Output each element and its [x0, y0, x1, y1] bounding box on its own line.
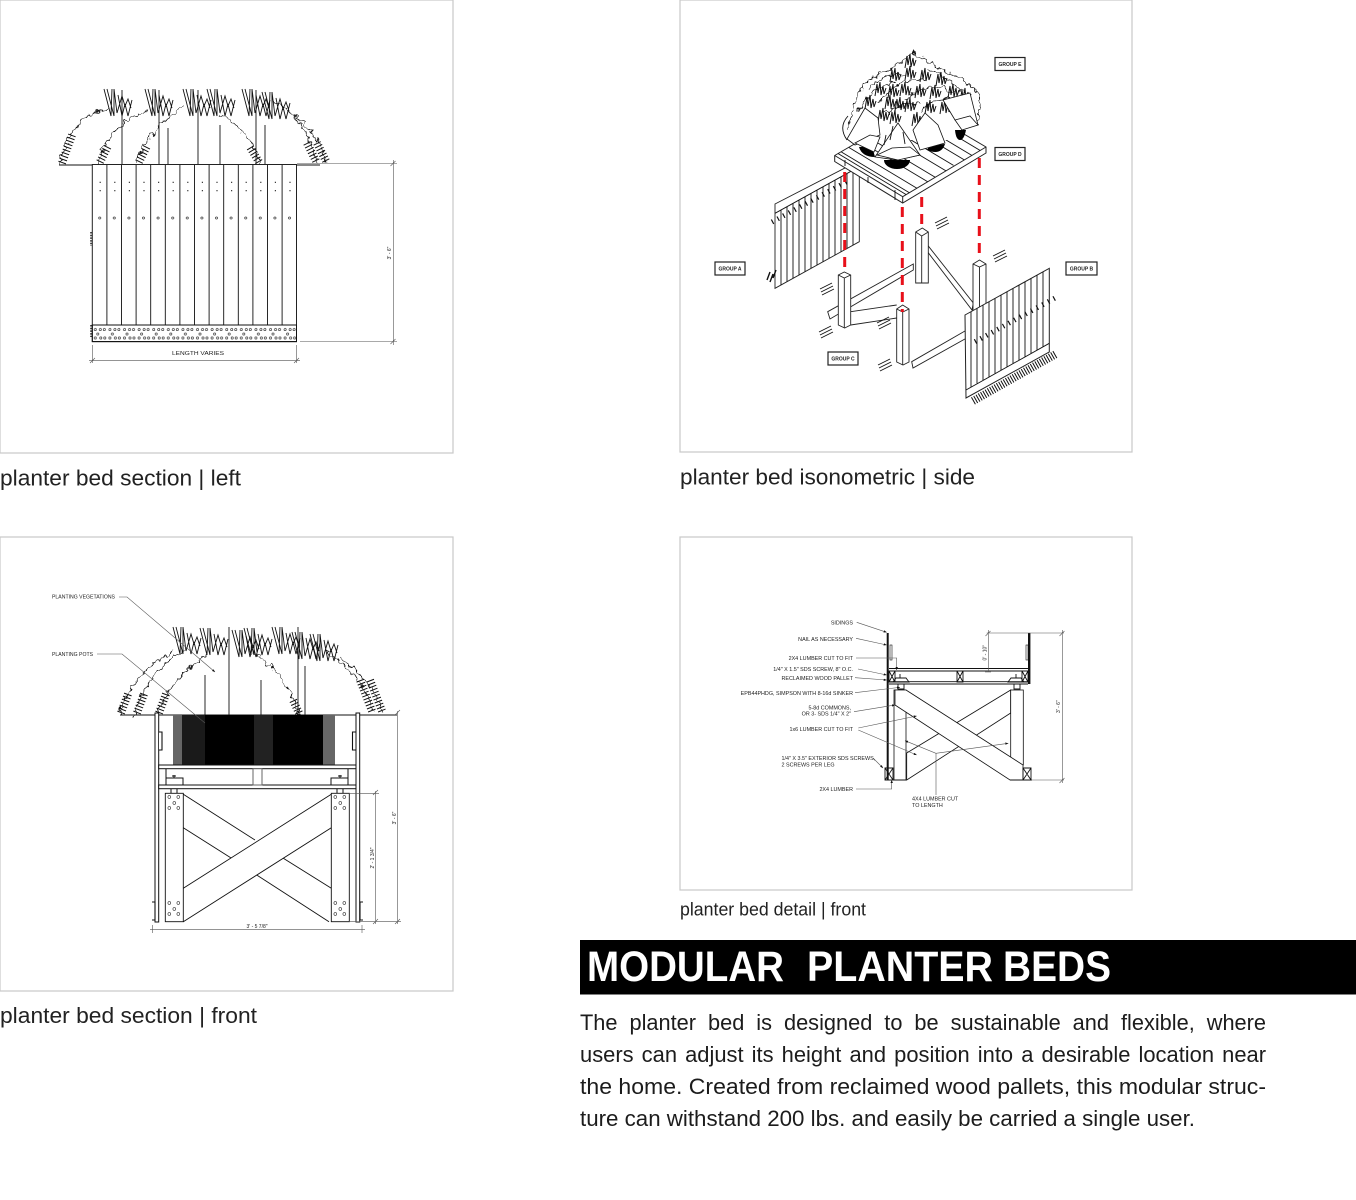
caption: section front: planter bed section | front [0, 1003, 257, 1028]
detail labels: 1/4" X 1.5" SDS SCREW, 8" O.C. [773, 667, 853, 673]
detail leaders [854, 622, 1008, 795]
black pots [859, 130, 966, 169]
description paragraph: The planter bed is designed to be sustainable and flexible, where [580, 1010, 1266, 1035]
callouts [52, 594, 215, 723]
dimension: height [297, 160, 397, 345]
detail labels: 1/4" X 3.5" EXTERIOR SDS SCREWS, [782, 756, 876, 762]
panel: planter bed isometric [680, 0, 1132, 452]
group labels: GROUP E [999, 62, 1022, 68]
group labels: GROUP A [718, 266, 742, 272]
planting pots [173, 715, 335, 765]
panel: planter bed section front [0, 537, 453, 991]
detail labels: OR 3- SDS 1/4" X 2" [802, 712, 851, 718]
dimension: length [89, 345, 300, 363]
group labels: GROUP C [831, 356, 855, 362]
callouts: PLANTING POTS [52, 652, 94, 658]
detail labels: 2X4 LUMBER [819, 787, 853, 793]
callouts: PLANTING VEGETATIONS [52, 594, 116, 600]
detail labels: 4X4 LUMBER CUT [912, 796, 959, 802]
dimensions [150, 710, 401, 933]
detail labels [741, 620, 959, 809]
detail dimensions: 3' - 6" [1056, 700, 1062, 713]
description paragraph: users can adjust its height and position into a desirable location near [580, 1042, 1266, 1067]
title banner: PLANTER [807, 943, 993, 991]
detail dimensions: 0' - 10" [982, 645, 988, 660]
siding group B [965, 268, 1056, 401]
plants group E [843, 53, 978, 169]
detail labels: RECLAIMED WOOD PALLET [782, 676, 854, 682]
description paragraph: the home. Created from reclaimed wood pallets, this modular struc- [580, 1074, 1266, 1099]
panel: planter bed section left [0, 0, 453, 453]
detail labels: 5-8d COMMONS, [808, 706, 851, 712]
vegetation: left section [59, 89, 327, 165]
dimensions: 3' - 6" [392, 811, 398, 824]
title banner [580, 940, 1356, 994]
caption: section left: planter bed section | left [0, 466, 241, 490]
title banner: BEDS [1003, 943, 1111, 991]
detail labels: 2X4 LUMBER CUT TO FIT [789, 656, 854, 662]
posts and braces group C [828, 228, 986, 368]
description paragraph [580, 1010, 1266, 1131]
vegetation: front section [120, 627, 397, 715]
siding group A [767, 167, 859, 288]
pallet and sidings [152, 713, 363, 922]
dimension: length: LENGTH VARIES [172, 351, 225, 357]
group labels [715, 58, 1097, 365]
detail dimensions [982, 630, 1064, 783]
dimensions: 3' - 5 7/8" [246, 924, 268, 930]
detail labels: TO LENGTH [912, 803, 943, 809]
plant cones [847, 93, 978, 160]
caption: detail front: planter bed detail | front [680, 900, 866, 920]
pallet group D [835, 107, 986, 203]
cross braces and legs [165, 793, 349, 922]
group labels: GROUP D [998, 152, 1022, 158]
detail labels: 2 SCREWS PER LEG [782, 762, 835, 768]
dimension: height: 3' - 6" [387, 246, 393, 259]
group labels: GROUP B [1070, 266, 1094, 272]
detail labels: SIDINGS [831, 620, 853, 626]
detail drawing [885, 633, 1032, 780]
planks [91, 164, 296, 342]
description paragraph: ture can withstand 200 lbs. and easily be carried a single user. [580, 1106, 1195, 1131]
panel: planter bed detail [680, 537, 1132, 890]
detail labels: 1x6 LUMBER CUT TO FIT [789, 727, 854, 733]
caption: isometric side: planter bed isonometric | side [680, 464, 975, 490]
detail labels: NAIL AS NECESSARY [798, 637, 853, 643]
detail labels: EPB44PHDG, SIMPSON WITH 8-16d SINKER [741, 691, 853, 697]
red dashed assembly lines [845, 158, 979, 312]
dimensions: 2' - 1 3/4" [370, 847, 376, 869]
fastener ticks [819, 217, 1007, 371]
title banner: MODULAR [587, 943, 784, 991]
